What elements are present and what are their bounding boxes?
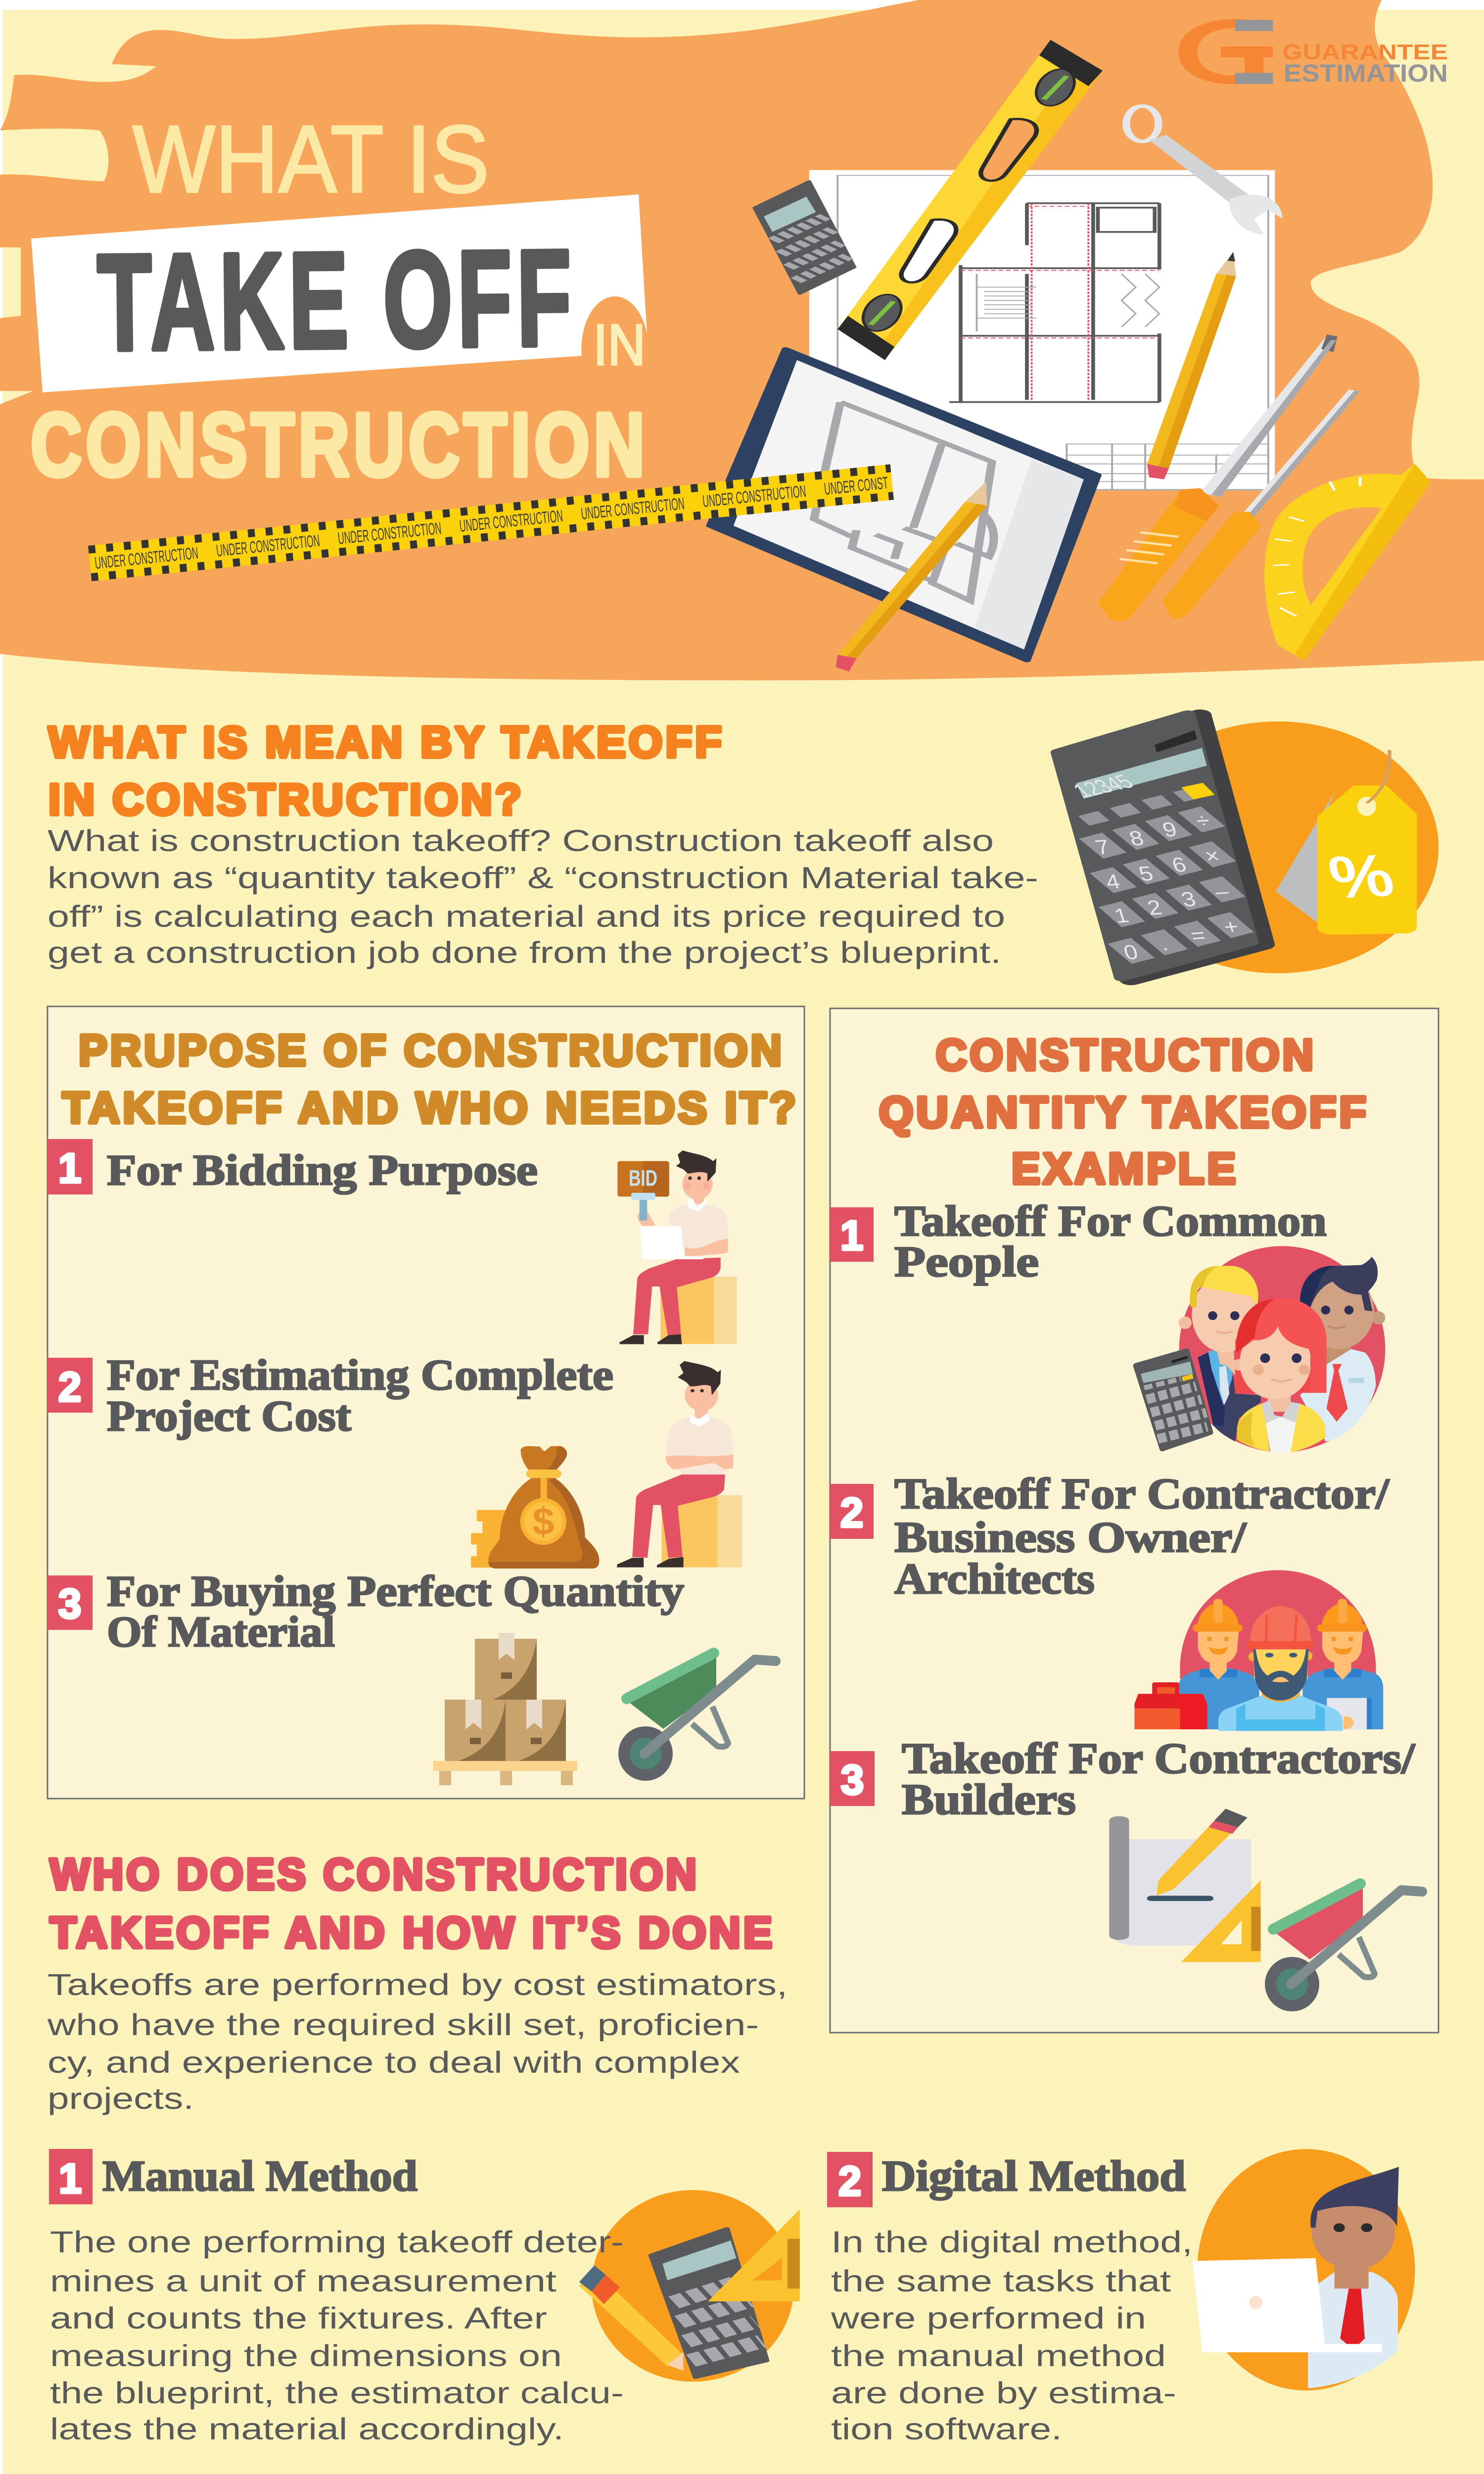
- who text: projects.: [47, 2082, 194, 2115]
- icon: calculator and price tag: [1058, 714, 1438, 980]
- panel: what is takeoff intro: [47, 714, 1438, 980]
- who text: Takeoffs are performed by cost estimators,: [47, 1968, 788, 2001]
- number 2: 2: [840, 1489, 863, 1536]
- item 1: takeoff for common people: [830, 1197, 1327, 1286]
- label: For Bidding Purpose: [107, 1146, 538, 1194]
- panel background: [830, 1008, 1438, 2033]
- label: Takeoff For Contractor/: [894, 1470, 1390, 1518]
- label: Business Owner/: [894, 1514, 1247, 1562]
- label: Builders: [902, 1776, 1076, 1824]
- icon: spirit level: [837, 40, 1103, 360]
- icon: calculator and price tag: 8: [1126, 826, 1147, 850]
- label: For Buying Perfect Quantity: [107, 1568, 684, 1616]
- illustration: green wheelbarrow: [618, 1653, 776, 1781]
- icon: calculator and price tag: %: [1323, 842, 1400, 911]
- badge 1: [830, 1207, 874, 1262]
- heading: what is mean by takeoff: WHAT IS MEAN BY TAKEOFF: [48, 717, 725, 766]
- number 1: 1: [58, 1145, 81, 1191]
- section: who does construction takeoff: [47, 1850, 788, 2115]
- heading: Digital Method: [882, 2152, 1186, 2200]
- panel: construction quantity takeoff example: [830, 1008, 1438, 2033]
- heading: example: EXAMPLE: [1012, 1144, 1239, 1193]
- illustration: man holding bid sign: [617, 1150, 737, 1344]
- under construction tape: UNDER CONSTRUCTION: [580, 494, 685, 523]
- title: construction: CONSTRUCTION: [31, 395, 649, 495]
- manual text: The one performing takeoff deter-: [50, 2225, 624, 2259]
- heading: who does: WHO DOES CONSTRUCTION: [50, 1850, 699, 1899]
- heading: example: QUANTITY TAKEOFF: [879, 1088, 1369, 1137]
- intro text: known as “quantity takeoff” & “construction Material take-: [47, 861, 1038, 895]
- illustration: stacked boxes: [433, 1633, 577, 1785]
- intro text: get a construction job done from the project’s blueprint.: [47, 936, 1001, 969]
- heading: example: CONSTRUCTION: [936, 1030, 1316, 1079]
- label: Architects: [894, 1555, 1095, 1603]
- intro text: off” is calculating each material and its price required to: [47, 900, 1005, 933]
- panel: purpose of construction takeoff: [47, 1006, 804, 1799]
- icon: calculator and price tag: –: [1211, 879, 1232, 903]
- icon: calculator and price tag: 4: [1103, 870, 1123, 893]
- illustration: red wheelbarrow: [1265, 1884, 1422, 2011]
- icon: calculator and price tag: 7: [1092, 835, 1113, 859]
- manual text: the blueprint, the estimator calcu-: [50, 2376, 624, 2410]
- manual text: measuring the dimensions on: [50, 2339, 562, 2373]
- badge 2: [47, 1358, 93, 1413]
- digital text: tion software.: [831, 2412, 1062, 2446]
- icon: calculator and price tag: 9: [1159, 818, 1180, 841]
- heading: what is mean by takeoff: IN CONSTRUCTION?: [48, 775, 524, 824]
- badge 3: [47, 1575, 93, 1630]
- logo: [1188, 20, 1448, 87]
- icon: calculator and price tag: 3: [1179, 888, 1199, 911]
- icon: man with laptop: [1193, 2149, 1415, 2390]
- under construction tape: [88, 464, 894, 581]
- item 3: takeoff for contractors builders: [830, 1735, 1416, 1824]
- intro text: What is construction takeoff? Construction takeoff also: [47, 824, 994, 857]
- digital text: are done by estima-: [831, 2376, 1176, 2410]
- icon: calculator and price tag: 1: [1112, 904, 1131, 927]
- badge 2: [827, 2152, 873, 2207]
- illustration: man holding bid sign: BID: [629, 1166, 657, 1191]
- digital text: were performed in: [831, 2301, 1146, 2335]
- logo text: estimation: ESTIMATION: [1284, 59, 1448, 87]
- under construction tape: UNDER CONST: [823, 474, 889, 499]
- badge 1: [47, 1139, 93, 1194]
- manual text: lates the material accordingly.: [50, 2412, 564, 2446]
- icon: calculator and price tag: 5: [1136, 862, 1156, 885]
- icon: calculator and price tag: ×: [1202, 844, 1222, 868]
- icon: calculator and price tag: 0: [1121, 941, 1141, 964]
- label: For Estimating Complete: [107, 1351, 613, 1399]
- item 1: for bidding purpose: [47, 1139, 538, 1194]
- title: what is: WHAT IS: [133, 105, 489, 212]
- icon: screwdrivers: [1098, 334, 1360, 621]
- orange header blob: [0, 0, 1484, 680]
- badge 1: [49, 2149, 93, 2204]
- illustration: plan with pencil and set square: [1109, 1808, 1261, 1962]
- section: digital method: [827, 2149, 1415, 2446]
- who text: who have the required skill set, proficien-: [47, 2008, 759, 2042]
- number 1: 1: [840, 1212, 863, 1259]
- icon: calculator and price tag: ÷: [1193, 809, 1212, 832]
- label: Takeoff For Common: [894, 1197, 1327, 1245]
- who text: cy, and experience to deal with complex: [47, 2046, 740, 2079]
- under construction tape: UNDER CONSTRUCTION: [216, 531, 321, 561]
- digital text: the manual method: [831, 2339, 1166, 2373]
- white title band: [31, 194, 648, 392]
- under construction tape: UNDER CONSTRUCTION: [94, 544, 199, 573]
- logo text: guarantee: GUARANTEE: [1282, 40, 1448, 64]
- illustration: money bag and seated man: [471, 1361, 742, 1569]
- manual text: and counts the fixtures. After: [50, 2301, 547, 2335]
- illustration: blueprint: [809, 170, 1275, 490]
- number 3: 3: [58, 1580, 81, 1627]
- number 1: 1: [59, 2155, 82, 2202]
- illustration: three people and calculator: [1136, 1246, 1385, 1452]
- icon: calculator and price tag: 2: [1145, 896, 1164, 919]
- number 2: 2: [838, 2158, 861, 2204]
- illustration: three builders and toolbox: [1134, 1570, 1383, 1731]
- heading: who does: TAKEOFF AND HOW IT’S DONE: [50, 1908, 775, 1957]
- digital text: In the digital method,: [831, 2225, 1193, 2259]
- digital text: the same tasks that: [831, 2264, 1171, 2298]
- manual text: mines a unit of measurement: [50, 2264, 556, 2298]
- icon: calculator and price tag: +: [1221, 915, 1242, 939]
- label: People: [894, 1238, 1039, 1286]
- title: take off: TAKE OFF: [96, 222, 577, 379]
- title: [31, 105, 649, 495]
- number 2: 2: [58, 1364, 81, 1410]
- under construction tape: UNDER CONSTRUCTION: [701, 482, 807, 511]
- heading: Manual Method: [102, 2152, 417, 2200]
- title: in: IN: [593, 312, 646, 377]
- icon: calculator and price tag: =: [1188, 924, 1208, 947]
- icon: tablet with plan: [710, 349, 1098, 661]
- heading: purpose: PRUPOSE OF CONSTRUCTION: [79, 1026, 785, 1075]
- icon: calculator and price tag: .: [1157, 932, 1171, 955]
- logo mark: [1188, 20, 1273, 84]
- section: manual method: [49, 2149, 800, 2446]
- label: Project Cost: [107, 1392, 351, 1440]
- icon: calculator and price tag: 6: [1169, 853, 1189, 876]
- badge 3: [830, 1751, 875, 1806]
- icon: calculator and price tag: 12345: [1067, 770, 1139, 802]
- icon: wrench: [1126, 106, 1283, 234]
- heading: purpose: TAKEOFF AND WHO NEEDS IT?: [62, 1083, 799, 1132]
- panel: header: [0, 0, 1484, 680]
- number 3: 3: [841, 1757, 864, 1803]
- icon: pencil on tablet: [835, 481, 987, 671]
- badge 2: [830, 1484, 874, 1539]
- icon: small calculator: [754, 181, 855, 294]
- orange circle behind in: [581, 296, 648, 369]
- label: Takeoff For Contractors/: [902, 1735, 1416, 1783]
- under construction tape: UNDER CONSTRUCTION: [459, 507, 564, 536]
- icon: pencil on blueprint: [1147, 252, 1236, 479]
- item 2: for estimating complete project cost: [47, 1351, 613, 1440]
- icon: protractor: [1264, 464, 1431, 661]
- icon: calculator set square pencil: [579, 2190, 800, 2381]
- panel background: [47, 1006, 804, 1799]
- item 3: for buying perfect quantity of material: [47, 1568, 684, 1656]
- item 2: takeoff for contractor: [830, 1470, 1390, 1603]
- under construction tape: UNDER CONSTRUCTION: [337, 519, 442, 548]
- illustration: money bag and seated man: $: [532, 1500, 554, 1543]
- label: Of Material: [107, 1608, 335, 1656]
